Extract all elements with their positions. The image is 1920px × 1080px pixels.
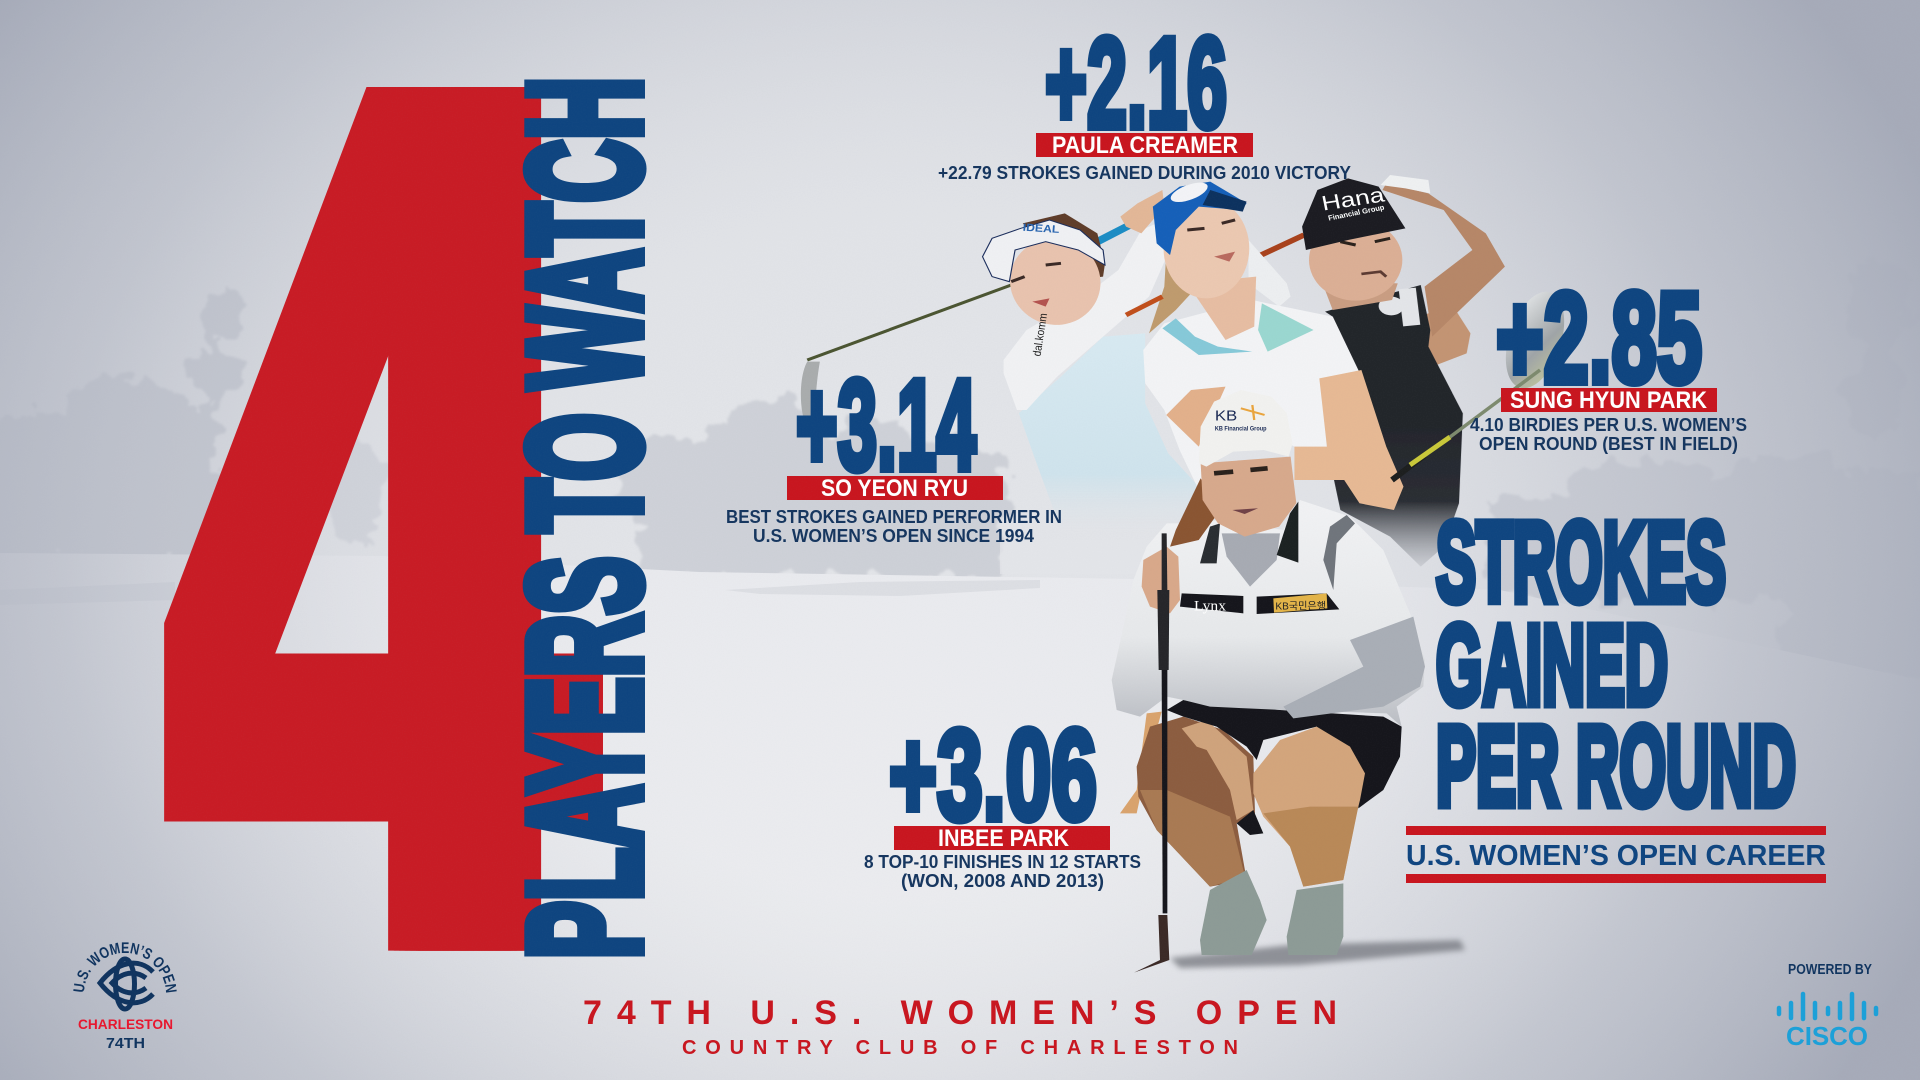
face (1309, 219, 1402, 301)
caption: U.S. WOMEN’S OPEN SINCE 1994 (753, 526, 1034, 546)
golfer: so yeon ryu: IDEAL (1022, 222, 1060, 236)
lynx band (1180, 593, 1243, 615)
value: +2.85 (1496, 267, 1702, 410)
logo: powered by cisco: CISCO (1786, 1021, 1868, 1051)
fairway (0, 553, 1920, 1080)
face (1201, 457, 1296, 537)
club shaft lower (1126, 297, 1162, 315)
event title (583, 994, 1337, 1059)
neck (1321, 280, 1398, 310)
event title: 74TH U.S. WOMEN’S OPEN (583, 994, 1337, 1032)
clubhouse (1000, 540, 1170, 574)
stat: so yeon ryu (726, 354, 1062, 546)
shoes (1200, 870, 1343, 955)
kb band: KB국민은행 (1275, 600, 1326, 612)
arm sleeve (1283, 617, 1425, 718)
back arm (1249, 240, 1291, 307)
hand (1120, 190, 1164, 233)
name bar: SUNG HYUN PARK (1510, 387, 1708, 414)
monogram (100, 959, 153, 1009)
stat: paula creamer (938, 12, 1351, 183)
caption: OPEN ROUND (BEST IN FIELD) (1479, 434, 1738, 454)
cap: KB Financial Group (1215, 426, 1267, 432)
subheading: u.s. women's open career (1406, 826, 1826, 883)
name bar: PAULA CREAMER (1052, 132, 1238, 159)
lynx band: Lynx (1194, 599, 1227, 615)
background trees (0, 260, 1920, 680)
ponytail (1149, 253, 1191, 333)
shirt (1143, 300, 1361, 490)
left shin highlight (1140, 790, 1245, 887)
head (1170, 390, 1296, 547)
heading: strokes gained per round (1436, 499, 1796, 829)
back arm (1421, 303, 1470, 367)
collar (1162, 303, 1314, 355)
caption (864, 852, 1141, 891)
ground shadow (1170, 940, 1465, 968)
face (1004, 233, 1107, 330)
shirt (1325, 285, 1463, 567)
event title: COUNTRY CLUB OF CHARLESTON (682, 1037, 1238, 1059)
visor (983, 220, 1105, 282)
right leg (1253, 727, 1365, 887)
face (1164, 198, 1249, 298)
club (801, 225, 1130, 427)
logo: u.s. women's open charleston: CHARLESTON (78, 1017, 173, 1032)
hair (1170, 478, 1218, 547)
logo: powered by cisco: POWERED BY (1788, 962, 1872, 978)
cap: KB (1215, 409, 1237, 424)
arm sleeve (1004, 220, 1168, 410)
subheading: u.s. women's open career: U.S. WOMEN’S OPEN CAREER (1406, 840, 1826, 872)
value: +3.06 (889, 704, 1097, 847)
stat: sung hyun park (1470, 267, 1747, 454)
heading: strokes gained per round: GAINED (1436, 602, 1668, 728)
cap (1302, 178, 1405, 250)
club: sung hyun park (1392, 284, 1575, 480)
logo: u.s. women's open charleston: U.S. WOMEN’S OPEN (73, 942, 177, 993)
golfer: paula creamer (1126, 179, 1403, 510)
right shin shade (1263, 807, 1358, 887)
caption: BEST STROKES GAINED PERFORMER IN (726, 507, 1062, 527)
value: +2.16 (1045, 12, 1227, 155)
golfer: so yeon ryu (801, 190, 1199, 533)
club shaft top (1250, 235, 1304, 260)
strap (1323, 515, 1355, 590)
upper arm (1166, 387, 1226, 447)
caption: 4.10 BIRDIES PER U.S. WOMEN’S (1470, 415, 1747, 435)
neck (1187, 277, 1256, 340)
forearm (1294, 370, 1403, 510)
sleeve patch (1379, 288, 1420, 326)
tree shadow on the fairway (725, 580, 1040, 596)
caption: (WON, 2008 AND 2013) (901, 871, 1104, 891)
skirt tail (1120, 712, 1162, 813)
cap: Hana (1319, 183, 1387, 215)
name bar: INBEE PARK (938, 825, 1070, 852)
caption (726, 507, 1062, 546)
hand and grip (1142, 547, 1180, 613)
logo: u.s. women's open charleston (73, 942, 177, 1052)
caption (1470, 415, 1747, 454)
left leg highlight (1182, 720, 1253, 820)
body (1112, 500, 1425, 973)
neck (1222, 533, 1280, 587)
cap (1199, 390, 1293, 467)
putter (1134, 533, 1169, 973)
shirt (1112, 500, 1425, 727)
sleeve logo: dal.komm (1031, 313, 1050, 357)
cap: Financial Group (1327, 203, 1385, 222)
caption: 8 TOP-10 FINISHES IN 12 STARTS (864, 852, 1141, 872)
cisco bars (1779, 994, 1876, 1019)
arm (1382, 183, 1505, 337)
logo: powered by cisco (1779, 962, 1876, 1051)
left fairway contour (0, 582, 175, 605)
glove (1381, 175, 1430, 193)
value: +3.14 (796, 354, 976, 497)
hair (1023, 213, 1105, 280)
skirt (1167, 700, 1402, 808)
torso (1019, 333, 1199, 533)
kb band (1257, 593, 1339, 614)
golfer: inbee park (1112, 390, 1465, 973)
name bar: SO YEON RYU (821, 475, 968, 502)
caption: +22.79 STROKES GAINED DURING 2010 VICTORY (938, 163, 1351, 183)
cap (1153, 179, 1247, 255)
left leg (1137, 717, 1255, 887)
logo: u.s. women's open charleston: 74TH (106, 1035, 145, 1052)
stat: inbee park (864, 704, 1141, 891)
collar (1200, 502, 1298, 563)
golfer: sung hyun park (1250, 175, 1505, 567)
name bar (894, 825, 1110, 852)
